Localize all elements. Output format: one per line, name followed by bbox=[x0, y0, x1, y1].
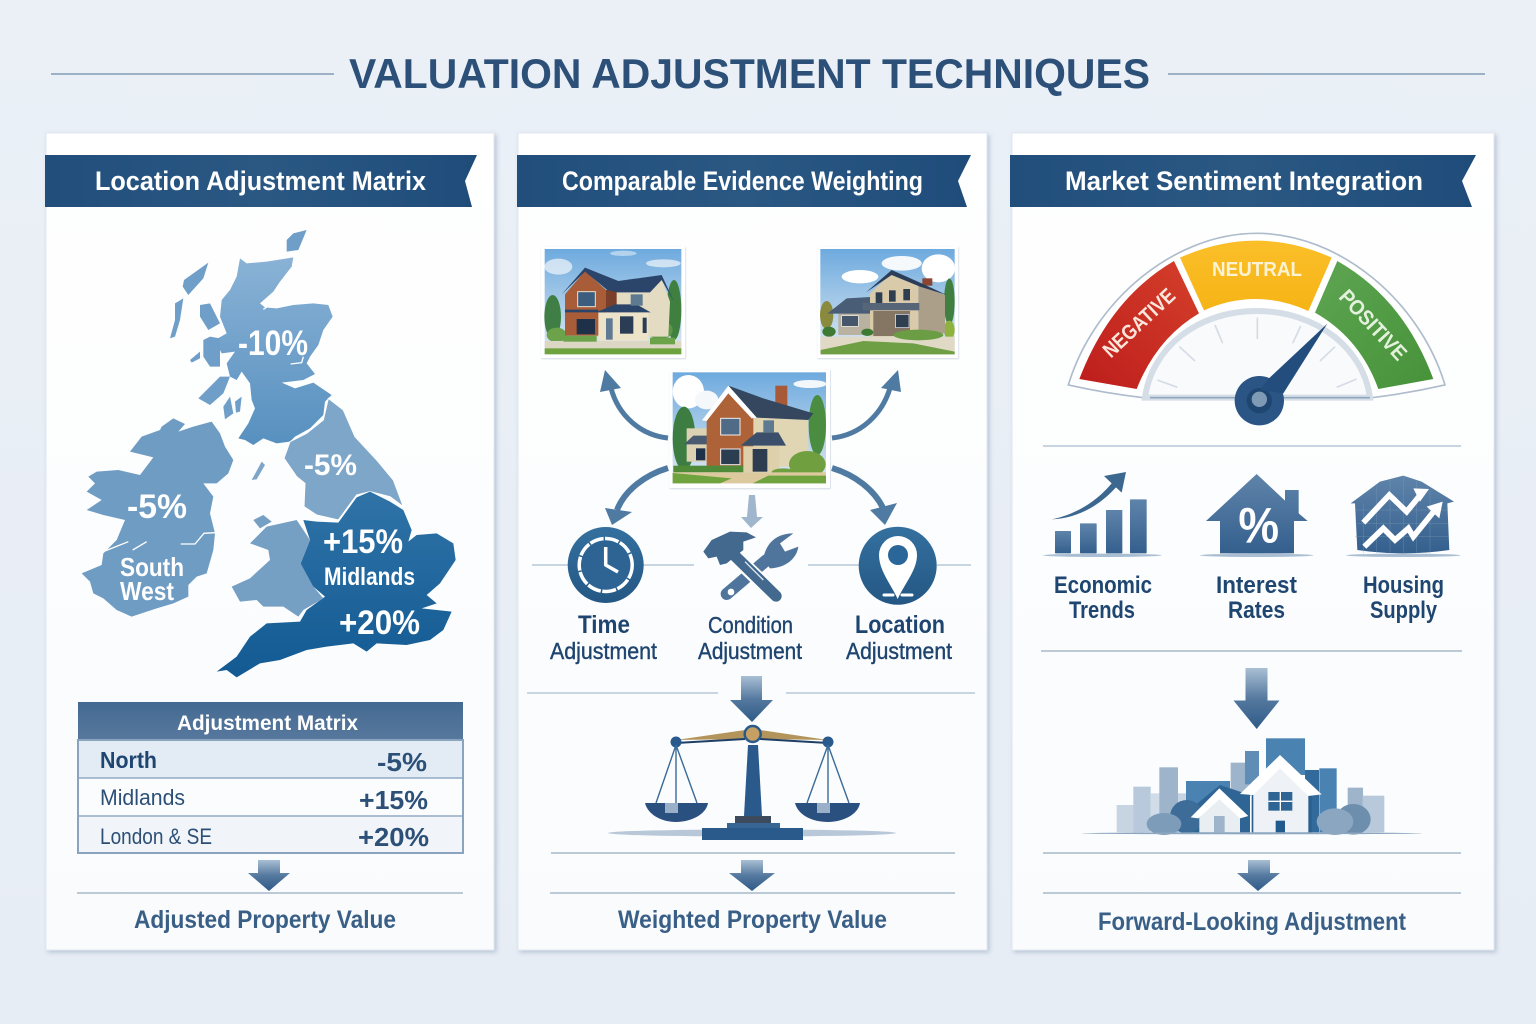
arrow: subject to comparable right bbox=[832, 370, 901, 438]
arrow: into scale bbox=[730, 676, 773, 722]
panel: location adjustment matrix bbox=[45, 133, 494, 950]
region: Ireland bbox=[82, 418, 233, 617]
label: economic trends: Economic bbox=[1054, 572, 1152, 599]
panel: comparable evidence weighting bbox=[517, 133, 987, 950]
arrow: subject to location adjustment bbox=[832, 468, 897, 525]
heading: comparable evidence weighting: Comparable Evidence Weighting bbox=[562, 166, 923, 196]
table: adjustment matrix bbox=[78, 702, 463, 853]
heading: location adjustment matrix: Location Adjustment Matrix bbox=[95, 166, 426, 196]
table: adjustment matrix: -5% bbox=[377, 747, 427, 777]
table: adjustment matrix: Midlands bbox=[100, 785, 185, 810]
label: condition adjustment: Condition bbox=[708, 612, 793, 638]
table: adjustment matrix: London & SE bbox=[100, 824, 212, 849]
arrow: to weighted value bbox=[729, 860, 775, 891]
label: housing supply bbox=[1363, 572, 1444, 624]
text: forward-looking adjustment: Forward-Looking Adjustment bbox=[1098, 908, 1407, 936]
label: South West line two: West bbox=[120, 576, 174, 606]
label: condition adjustment bbox=[698, 612, 803, 664]
label: housing supply: Housing bbox=[1363, 572, 1444, 599]
arrow: subject to time adjustment bbox=[605, 468, 668, 525]
label: location adjustment: Location bbox=[855, 611, 945, 639]
table: adjustment matrix: +20% bbox=[358, 822, 429, 852]
label: location adjustment bbox=[846, 611, 953, 664]
gauge label: neutral: NEUTRAL bbox=[1212, 259, 1302, 281]
icon: hammer and wrench bbox=[703, 532, 798, 597]
arrow: subject to condition adjustment bbox=[741, 495, 763, 528]
arrow: to adjusted value bbox=[248, 860, 290, 891]
icon: balance scale bbox=[608, 726, 896, 840]
label: housing supply: Supply bbox=[1370, 597, 1438, 624]
label: time adjustment: Adjustment bbox=[550, 638, 658, 664]
icon: housing supply bbox=[1346, 476, 1461, 557]
gauge label: positive: POSITIVE bbox=[1334, 285, 1411, 365]
label: Ireland -5%: -5% bbox=[127, 488, 187, 526]
label: interest rates bbox=[1216, 572, 1297, 624]
region: Midlands and South East bbox=[217, 492, 456, 677]
label: Scotland -10%: -10% bbox=[238, 324, 308, 363]
label: +20%: +20% bbox=[339, 604, 420, 642]
label: time adjustment bbox=[550, 611, 658, 664]
arrow: subject to comparable left bbox=[600, 370, 668, 438]
label: South West: South bbox=[120, 552, 184, 582]
label: interest rates: Rates bbox=[1228, 597, 1285, 624]
label: location adjustment: Adjustment bbox=[846, 638, 953, 664]
icon: clock bbox=[568, 527, 644, 603]
photo: comparable house left bbox=[541, 247, 685, 358]
table: adjustment matrix: +15% bbox=[359, 785, 428, 815]
gauge needle bbox=[1235, 324, 1327, 425]
table: adjustment matrix: North bbox=[100, 747, 157, 773]
icon: interest rates house: % bbox=[1238, 498, 1279, 554]
label: economic trends bbox=[1054, 572, 1152, 624]
icon: location pin bbox=[859, 527, 937, 605]
icon: interest rates house bbox=[1200, 474, 1313, 557]
label: condition adjustment: Adjustment bbox=[698, 638, 803, 664]
table: adjustment matrix: Adjustment Matrix bbox=[177, 712, 358, 735]
arrow: into skyline bbox=[1234, 668, 1280, 729]
heading: market sentiment integration bbox=[1010, 155, 1476, 207]
gauge segment: positive bbox=[1315, 261, 1433, 389]
text: weighted property value: Weighted Property Value bbox=[618, 906, 887, 934]
icon: economic trends chart bbox=[1043, 472, 1162, 557]
label: Midlands: Midlands bbox=[324, 563, 415, 591]
region: Wales bbox=[232, 515, 323, 617]
region: Northern England bbox=[284, 398, 403, 520]
label: economic trends: Trends bbox=[1069, 597, 1135, 624]
gauge: market sentiment bbox=[1068, 233, 1445, 425]
label: +15%: +15% bbox=[323, 523, 403, 561]
panel: market sentiment integration bbox=[1010, 133, 1494, 950]
label: interest rates: Interest bbox=[1216, 572, 1297, 599]
gauge dial bbox=[1145, 311, 1370, 398]
heading: market sentiment integration: Market Sentiment Integration bbox=[1065, 166, 1423, 196]
label: time adjustment: Time bbox=[578, 611, 630, 639]
arrow: to forward-looking adjustment bbox=[1237, 860, 1280, 891]
photo: subject house centre bbox=[669, 370, 830, 488]
text: adjusted property value: Adjusted Property Value bbox=[134, 906, 396, 934]
gauge segment: negative bbox=[1079, 261, 1199, 389]
title: VALUATION ADJUSTMENT TECHNIQUES bbox=[349, 50, 1150, 97]
gauge label: negative: NEGATIVE bbox=[1099, 284, 1180, 362]
photo: comparable house right bbox=[817, 247, 958, 358]
icon: housing skyline bbox=[1082, 738, 1422, 835]
region: Scotland bbox=[170, 230, 333, 445]
heading: location adjustment matrix bbox=[45, 155, 477, 207]
heading: comparable evidence weighting bbox=[517, 155, 971, 207]
map: UK and Ireland regions bbox=[82, 230, 456, 677]
label: North -5%: -5% bbox=[304, 449, 357, 482]
gauge segment: neutral bbox=[1180, 241, 1332, 311]
